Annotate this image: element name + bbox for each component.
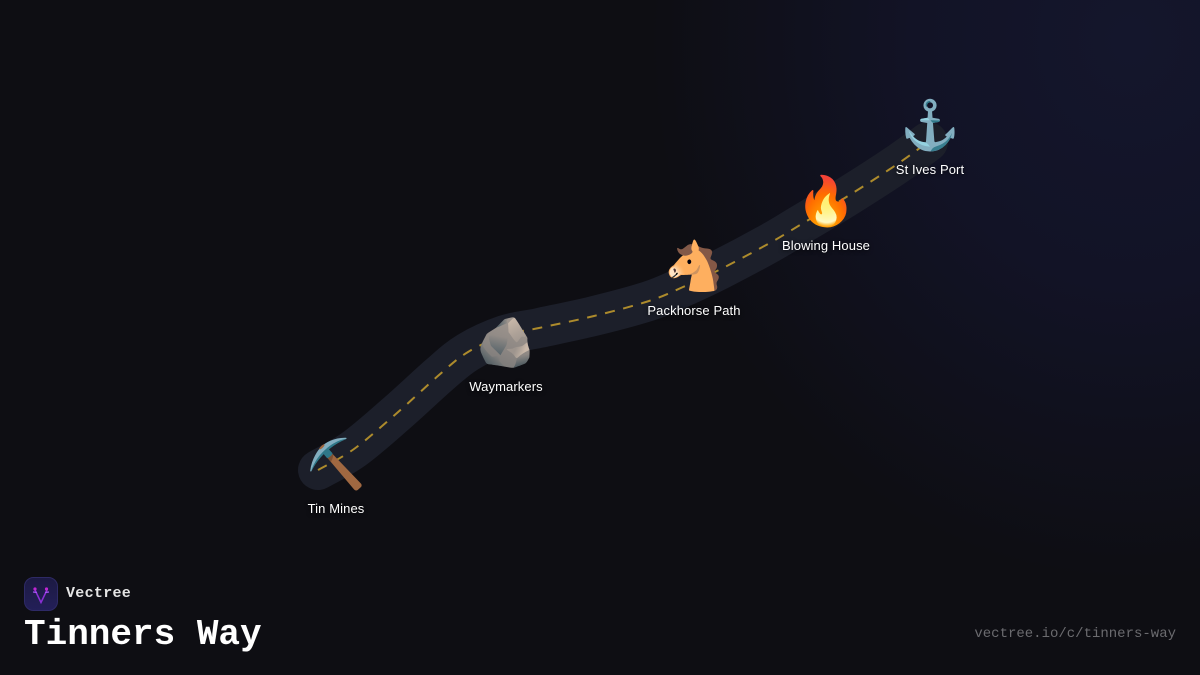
stop: Waymarkers [469,314,543,394]
icon: pick: ⛏️ [306,436,366,492]
route dashed line [318,142,928,470]
icon: anchor: ⚓ [900,96,960,154]
stop: Tin Mines [306,436,366,516]
brand name: Vectree [66,585,131,602]
stop: Blowing House [782,172,870,253]
stop: St Ives Port [896,96,964,177]
label: Blowing House: Blowing House [782,238,870,253]
label: Waymarkers: Waymarkers [469,379,543,394]
brand [24,577,131,611]
stop: Packhorse Path [647,238,741,318]
source URL: vectree.io/c/tinners-way [974,626,1176,642]
icon: rock: 🪨 [476,314,536,370]
icon: Vectree logo [24,577,58,611]
label: Tin Mines: Tin Mines [308,501,364,516]
route band [318,142,928,470]
title: Tinners Way [24,614,262,655]
label: St Ives Port: St Ives Port [896,162,964,177]
label: Packhorse Path: Packhorse Path [647,303,741,318]
icon: horse: 🐴 [664,238,724,294]
icon: fire: 🔥 [796,172,856,230]
